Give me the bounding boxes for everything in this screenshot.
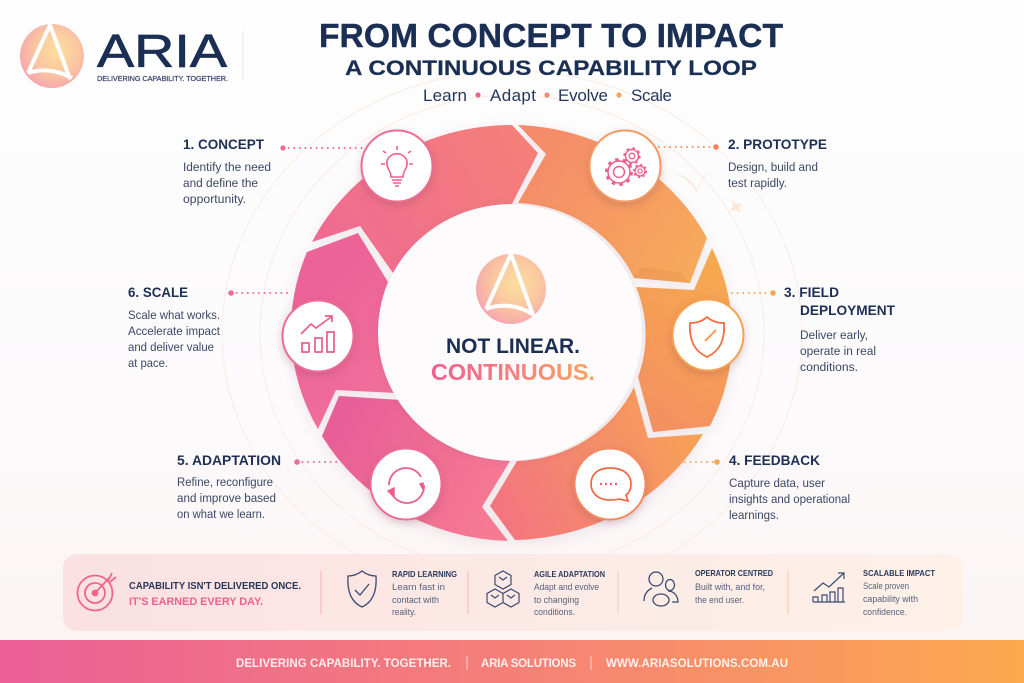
tagline: learn adapt evolve scale: Learn [423, 86, 467, 105]
operator centred text: Built with, and for, [695, 582, 765, 592]
step 4: feedback: insights and operational [729, 492, 850, 506]
agile adaptation text: Adapt and evolve [534, 582, 599, 592]
callout text: CAPABILITY ISN'T DELIVERED ONCE. [129, 581, 301, 592]
step 1: concept: and define the [183, 176, 258, 190]
step 5: adaptation: on what we learn. [177, 507, 265, 521]
step 1: concept [183, 136, 271, 206]
bottom panel [63, 554, 963, 631]
centre text [431, 335, 595, 385]
footer band: ARIA SOLUTIONS [481, 658, 576, 670]
agile adaptation text: to changing [534, 595, 579, 605]
scalable impact text: SCALABLE IMPACT [863, 568, 936, 578]
title: FROM CONCEPT TO IMPACT [319, 17, 783, 54]
step 6: scale: at pace. [128, 356, 168, 370]
footer band [0, 640, 1024, 683]
step 4: feedback: 4. FEEDBACK [729, 452, 820, 468]
footer band: WWW.ARIASOLUTIONS.COM.AU [606, 658, 788, 670]
step 2: prototype: Design, build and [728, 160, 818, 174]
title [319, 17, 783, 80]
step 3: field deployment: 3. FIELD [784, 284, 839, 300]
step 5: adaptation: Refine, reconfigure [177, 475, 273, 489]
centre text: NOT LINEAR. [446, 335, 580, 358]
step 4: feedback: learnings. [729, 508, 779, 522]
step 3: field deployment [784, 284, 895, 374]
logo: ARIA: ARIA [97, 25, 227, 77]
logo: ARIA: DELIVERING CAPABILITY. TOGETHER. [97, 74, 228, 83]
step 3: field deployment: conditions. [800, 360, 858, 374]
step 2: prototype: test rapidly. [728, 176, 787, 190]
centre circle [378, 204, 642, 460]
icon: target [78, 573, 116, 610]
step 6: scale: Accelerate impact [128, 324, 221, 338]
icon: feedback speech bubble [574, 448, 646, 520]
callout text: IT'S EARNED EVERY DAY. [129, 596, 263, 608]
step 1: concept: 1. CONCEPT [183, 136, 264, 152]
icon: concept lightbulb [362, 130, 432, 202]
step 4: feedback: Capture data, user [729, 476, 825, 490]
step 2: prototype: 2. PROTOTYPE [728, 136, 827, 152]
agile adaptation text [534, 569, 605, 617]
rapid learning text: Learn fast in [392, 582, 445, 592]
step 3: field deployment: Deliver early, [800, 328, 868, 342]
operator centred text: OPERATOR CENTRED [695, 568, 773, 578]
agile adaptation text: conditions. [534, 607, 575, 617]
centre text: CONTINUOUS. [431, 359, 595, 385]
step 4: feedback [729, 452, 850, 522]
scalable impact text: confidence. [863, 607, 907, 617]
step 6: scale: and deliver value [128, 340, 214, 354]
rapid learning text: RAPID LEARNING [392, 569, 457, 579]
step 5: adaptation: 5. ADAPTATION [177, 452, 281, 468]
scalable impact text: capability with [863, 594, 918, 604]
step 2: prototype [728, 136, 827, 190]
operator centred text [695, 568, 773, 605]
logo: ARIA [20, 24, 228, 88]
rapid learning text: contact with [392, 595, 439, 605]
tagline: learn adapt evolve scale: Evolve [558, 86, 608, 105]
rapid learning text [392, 569, 457, 617]
step 3: field deployment: DEPLOYMENT [800, 302, 895, 318]
step 3: field deployment: operate in real [800, 344, 876, 358]
icon: scale bar chart [282, 300, 354, 372]
step 6: scale [128, 284, 221, 370]
segment 6 [291, 233, 396, 429]
operator centred text: the end user. [695, 595, 744, 605]
step 1: concept: Identify the need [183, 160, 271, 174]
icon: prototype gears [590, 130, 660, 202]
scalable impact text: Scale proven [863, 581, 909, 591]
title: A CONTINUOUS CAPABILITY LOOP [345, 56, 757, 80]
callout text [129, 581, 301, 608]
icon: agile adaptation cubes [487, 571, 519, 607]
step 5: adaptation [177, 452, 281, 521]
icon: rapid learning shield [348, 571, 376, 607]
step 6: scale: Scale what works. [128, 308, 220, 322]
segment 2 [518, 125, 707, 283]
icon: adaptation arrows [370, 448, 442, 520]
cycle ring [291, 125, 732, 541]
segment 1 [312, 125, 538, 273]
step 5: adaptation: and improve based [177, 491, 276, 505]
step 1: concept: opportunity. [183, 192, 246, 206]
footer band: DELIVERING CAPABILITY. TOGETHER. [236, 658, 451, 670]
segment 3 [636, 248, 732, 432]
tagline: learn adapt evolve scale: Scale [631, 86, 672, 105]
rapid learning text: reality. [392, 607, 416, 617]
step 6: scale: 6. SCALE [128, 284, 188, 300]
icon: operator centred people [644, 572, 678, 606]
icon: field deployment shield [672, 300, 744, 370]
tagline: learn adapt evolve scale [423, 86, 672, 105]
segment 4 [490, 387, 703, 540]
icon: scalable impact chart [813, 573, 845, 602]
segment 5 [322, 396, 510, 541]
agile adaptation text: AGILE ADAPTATION [534, 569, 605, 579]
centre logo [476, 254, 546, 324]
scalable impact text [863, 568, 936, 617]
connector lines [231, 147, 773, 462]
tagline: learn adapt evolve scale: Adapt [490, 86, 536, 105]
